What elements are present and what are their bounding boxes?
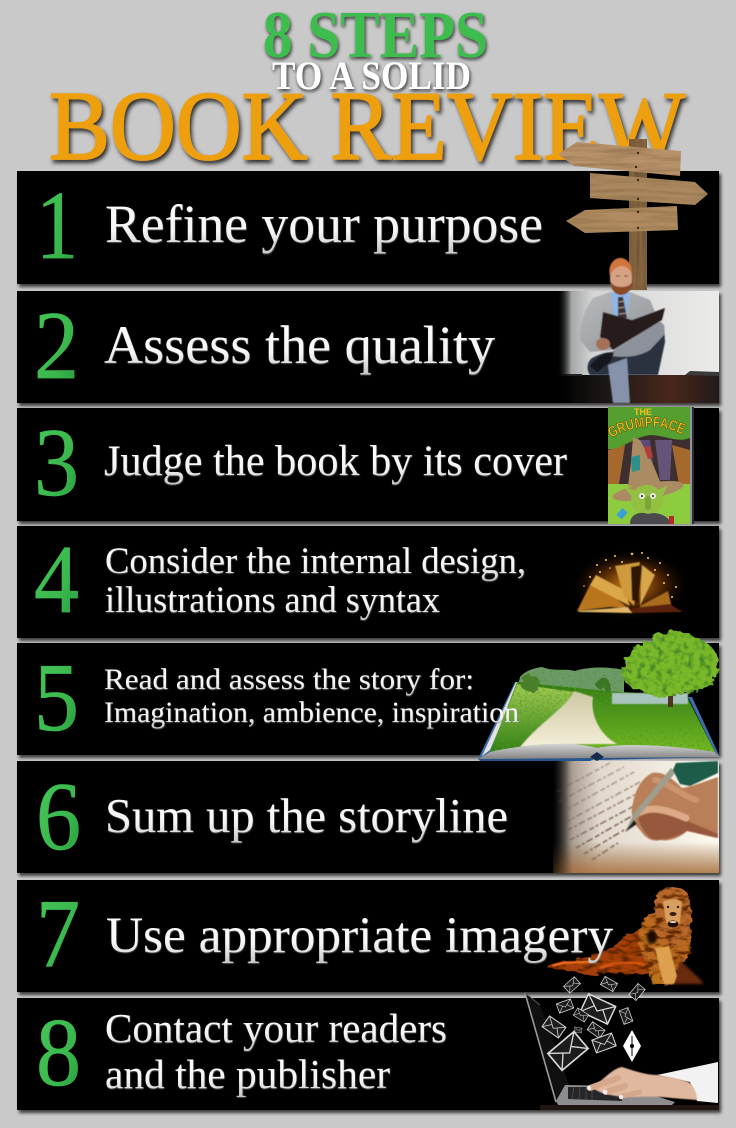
step 2 text: Assess the quality: [104, 315, 495, 375]
number 4: 4: [34, 526, 79, 633]
title: [49, 0, 686, 181]
step 8 text line 1: Contact your readers: [105, 1005, 447, 1051]
cover title: GRUMPFACE: [608, 416, 686, 437]
icon: fiery lion: [547, 887, 704, 985]
number 3: 3: [34, 409, 79, 517]
title line: TO A SOLID: TO A SOLID: [272, 53, 471, 98]
step 5 text line 2: Imagination, ambience, inspiration: [104, 696, 519, 729]
sleeve: [657, 1062, 718, 1103]
typing hand: [590, 1067, 697, 1100]
lower leg: [608, 358, 630, 403]
step 6 text: Sum up the storyline: [105, 788, 508, 843]
number 1: 1: [36, 172, 78, 279]
title line: BOOK REVIEW: BOOK REVIEW: [49, 72, 686, 181]
hand: [632, 773, 718, 841]
icon: glowing open book: [570, 549, 690, 621]
title line: 8 STEPS: 8 STEPS: [263, 0, 488, 72]
hand: [596, 338, 610, 350]
icon: laptop with flying envelopes: [525, 976, 719, 1110]
number 7: 7: [36, 880, 80, 987]
chest shadow: [647, 930, 657, 944]
photo: hand writing with quill: [553, 761, 719, 873]
step 1 text: Refine your purpose: [105, 194, 543, 254]
raised thigh: [612, 322, 664, 357]
body: [638, 912, 692, 985]
step labels: [104, 194, 614, 1097]
fire trail: [547, 925, 660, 975]
step 4 text line 2: illustrations and syntax: [105, 579, 440, 620]
panel backgrounds: [17, 171, 719, 1110]
quill: [625, 768, 676, 832]
cover title: THE: [634, 407, 652, 417]
icon: open book with landscape and tree: [478, 631, 720, 761]
step 7 text: Use appropriate imagery: [106, 908, 614, 964]
folder: [600, 308, 665, 350]
icon: wooden signpost: [558, 139, 708, 290]
step 8 text line 2: and the publisher: [105, 1051, 390, 1097]
envelopes: [542, 976, 645, 1070]
number 5: 5: [34, 644, 79, 751]
step 3 text: Judge the book by its cover: [104, 438, 567, 485]
number 8: 8: [36, 999, 81, 1107]
icon: pen nib: [623, 1030, 641, 1062]
seat and dark leg: [588, 325, 665, 375]
step numbers: [34, 172, 81, 1107]
head: [610, 261, 632, 295]
face: [663, 899, 682, 928]
mane: [653, 887, 692, 945]
jacket: [580, 292, 664, 352]
step 5 text line 1: Read and assess the story for:: [104, 663, 474, 696]
number 2: 2: [34, 292, 79, 400]
photo: man reading: [557, 258, 719, 403]
shoe: [590, 353, 614, 372]
step 4 text line 1: Consider the internal design,: [105, 540, 526, 581]
icon: The Grumpface book cover: [608, 407, 694, 524]
front leg: [655, 946, 677, 984]
number 6: 6: [36, 763, 81, 871]
